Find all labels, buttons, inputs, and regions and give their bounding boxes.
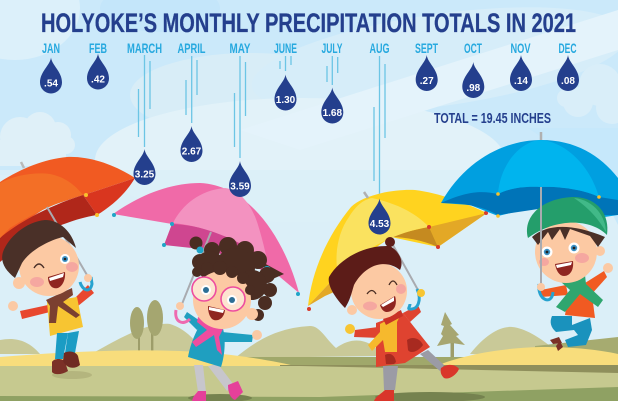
raindrop values bbox=[40, 54, 579, 234]
girl with pink umbrella bbox=[176, 232, 284, 401]
month labels: JAN bbox=[42, 40, 60, 56]
boy with orange umbrella bbox=[2, 207, 94, 374]
boy with blue umbrella bbox=[527, 187, 613, 351]
drop: January: .54 bbox=[44, 78, 58, 90]
ground bbox=[0, 347, 618, 401]
drop: February: .42 bbox=[91, 74, 105, 86]
drop: December: .08 bbox=[561, 76, 575, 87]
drop: July bbox=[321, 88, 343, 124]
drop: June: 1.30 bbox=[276, 95, 296, 106]
drop: September bbox=[416, 55, 438, 91]
drop: November: .14 bbox=[514, 76, 528, 87]
month labels: DEC bbox=[558, 40, 576, 56]
drop: August: 4.53 bbox=[370, 219, 390, 230]
drop: March bbox=[134, 149, 156, 185]
month labels: JULY bbox=[322, 40, 343, 56]
month labels: FEB bbox=[89, 40, 107, 56]
background trees bbox=[130, 300, 465, 360]
drop: October: .98 bbox=[466, 83, 481, 94]
drop: August bbox=[368, 198, 390, 234]
rain streaks bbox=[138, 55, 385, 205]
drop: May: 3.59 bbox=[230, 182, 250, 192]
drop: April bbox=[180, 126, 202, 162]
drop: July: 1.68 bbox=[323, 108, 342, 119]
cloud: left bbox=[0, 112, 75, 166]
cloud: right bbox=[557, 64, 618, 124]
month labels: MAY bbox=[230, 40, 251, 56]
month labels: JUNE bbox=[274, 40, 297, 56]
umbrella: yellow bbox=[307, 190, 488, 311]
drop: December bbox=[557, 55, 579, 91]
drop: May bbox=[229, 161, 251, 197]
month labels: APRIL bbox=[178, 40, 206, 56]
month labels: OCT bbox=[464, 40, 482, 56]
drop: April: 2.67 bbox=[182, 146, 202, 158]
drop: March: 3.25 bbox=[135, 170, 155, 180]
hills bbox=[0, 324, 618, 358]
month labels: NOV bbox=[510, 40, 531, 56]
total: TOTAL = 19.45 INCHES bbox=[434, 111, 551, 127]
umbrella: pink bbox=[112, 183, 300, 296]
drop: November bbox=[510, 55, 532, 91]
month labels: SEPT bbox=[415, 40, 438, 56]
umbrella: blue bbox=[441, 132, 618, 218]
drop: February bbox=[87, 54, 109, 90]
drop: October bbox=[462, 62, 484, 98]
month labels bbox=[42, 40, 576, 56]
month labels: MARCH bbox=[127, 40, 162, 56]
drop: June bbox=[274, 74, 296, 110]
drop: September: .27 bbox=[420, 76, 434, 87]
umbrella: orange bbox=[0, 157, 135, 262]
month labels: AUG bbox=[370, 40, 390, 56]
child with yellow umbrella bbox=[329, 192, 459, 401]
drop: January bbox=[40, 58, 62, 94]
